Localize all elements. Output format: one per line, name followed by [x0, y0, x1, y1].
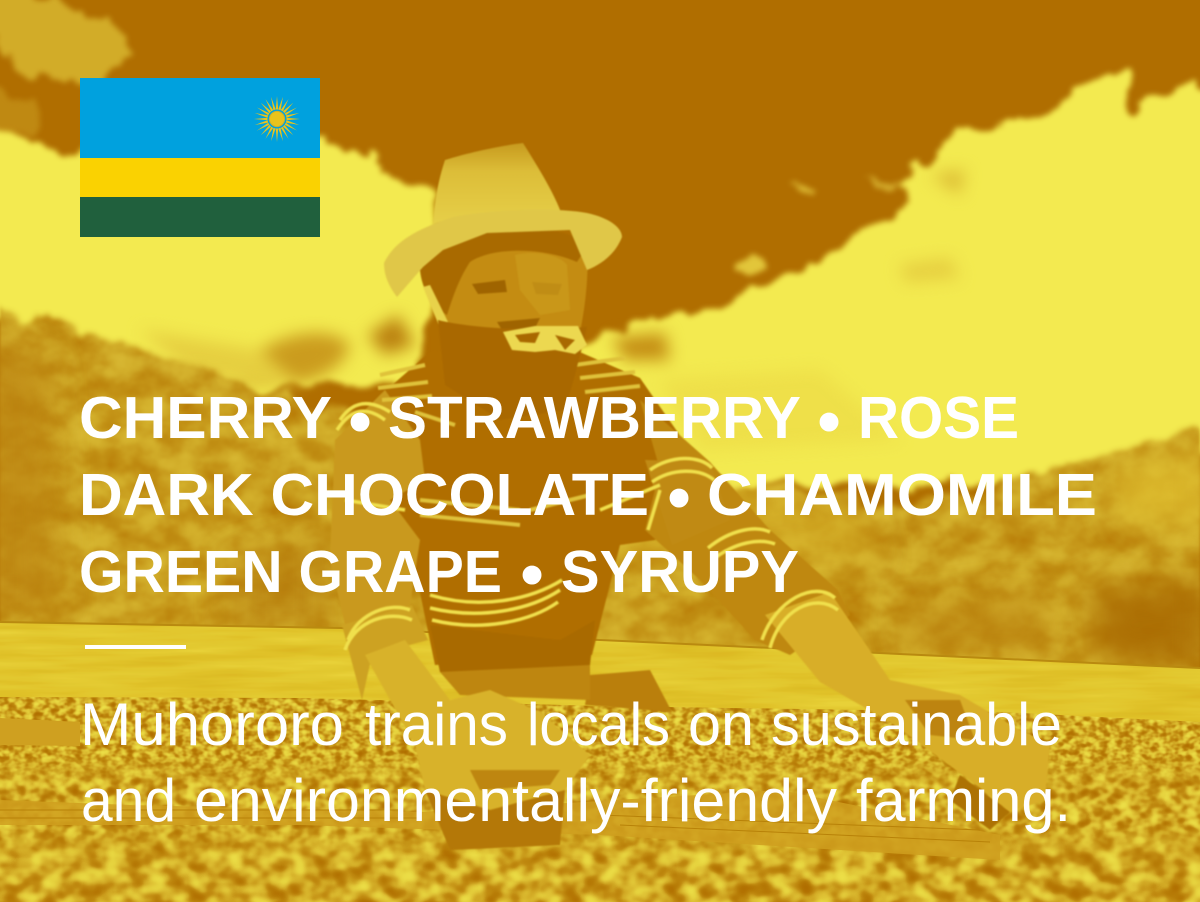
flag sun: [254, 96, 300, 142]
drying tables: [0, 623, 1200, 722]
table edge shadow: [0, 622, 1200, 668]
flavor line 2: [79, 460, 1097, 534]
cloud shading: [140, 170, 965, 450]
left upper arm: [330, 390, 425, 625]
flavor line 1: •: [348, 384, 372, 458]
flavor line 1: CHERRY: [79, 385, 332, 451]
torso: [345, 350, 722, 665]
farmer: [330, 143, 1050, 850]
coffee beans: [0, 697, 1200, 902]
hat brim: [384, 210, 622, 297]
description line 1: [80, 691, 1062, 758]
chin strap: [423, 285, 448, 328]
clouds: [0, 0, 1200, 490]
description line 2: farming.: [856, 767, 1071, 834]
divider rule: [85, 645, 186, 649]
flavor line 3: [79, 537, 799, 611]
description line 1: sustainable: [771, 691, 1062, 758]
distant hills: [0, 306, 1200, 667]
flavor line 2: DARK CHOCOLATE: [79, 462, 649, 528]
description line 2: and: [81, 767, 176, 834]
left cuff: [342, 605, 428, 700]
flavor line 2: •: [667, 460, 691, 534]
flavor line 3: •: [520, 537, 544, 611]
scarf pattern: [503, 326, 587, 354]
flag of Rwanda: [80, 78, 320, 237]
flavor line 2: CHAMOMILE: [707, 462, 1097, 528]
flavor line 1: ROSE: [858, 385, 1019, 451]
hair: [420, 230, 586, 315]
flavor line 1: STRAWBERRY: [388, 385, 801, 451]
hat crown: [433, 143, 562, 224]
trousers and bench: [430, 620, 595, 680]
description line 1: locals: [527, 691, 670, 758]
description line 2: [81, 767, 1071, 834]
right forearm and hand: [765, 592, 1050, 812]
flavor line 3: GREEN GRAPE: [79, 539, 502, 605]
description line 2: environmentally-friendly: [194, 767, 837, 834]
flavor line 1: •: [817, 384, 841, 458]
jersey stripes: [337, 404, 838, 650]
head: [424, 232, 588, 345]
description line 1: trains: [365, 691, 508, 758]
left forearm and hand: [365, 640, 590, 810]
flavor notes heading: [79, 384, 1097, 611]
scarf: [438, 320, 587, 420]
flavor line 3: SYRUPY: [561, 539, 799, 605]
eyes and shadow: [472, 280, 562, 330]
right upper arm: [640, 400, 850, 655]
description line 1: Muhororo: [80, 691, 344, 758]
flavor line 1: [79, 384, 1019, 458]
description line 1: on: [688, 691, 754, 758]
